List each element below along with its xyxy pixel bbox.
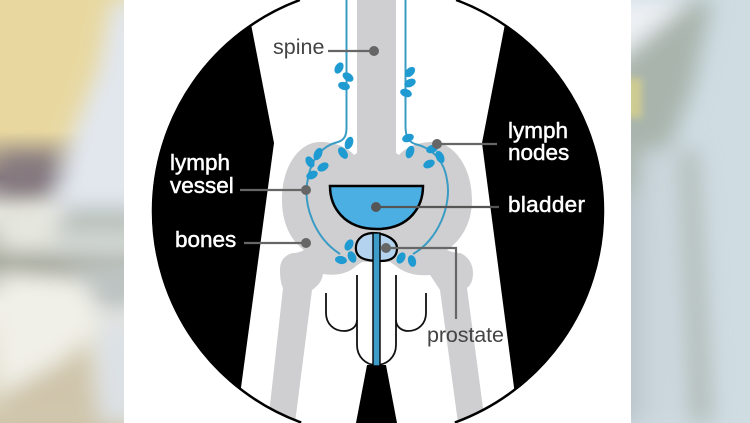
circular anatomy diagram (152, 0, 604, 423)
label: lymph nodes: nodes (508, 140, 569, 165)
label: lymph vessel: vessel (170, 173, 234, 198)
penis outline and testes (326, 275, 426, 365)
prostate (356, 233, 397, 261)
leader: lymph vessel (240, 185, 311, 195)
label: bladder: bladder (508, 192, 586, 217)
bladder (330, 186, 423, 229)
label: lymph vessel: lymph (170, 150, 230, 175)
lymph vessels (307, 0, 448, 254)
urethra (373, 233, 380, 366)
white centre panel (124, 0, 631, 423)
blurred photo background: right (631, 0, 750, 423)
crotch black wedge (356, 365, 397, 423)
blurred photo background: left (0, 0, 124, 423)
label: prostate: prostate (427, 323, 504, 347)
white body silhouette (236, 0, 519, 423)
leader: prostate (381, 243, 456, 319)
bones: spine, pelvis and femurs (268, 0, 485, 423)
label: bones: bones (175, 227, 236, 252)
circle outline over white body (153, 0, 603, 422)
label: spine: spine (273, 35, 324, 59)
label: lymph nodes: lymph (508, 118, 568, 143)
leader: lymph nodes (432, 139, 497, 149)
leader: bones (244, 238, 311, 248)
leader: spine (328, 46, 379, 56)
leader: bladder (371, 202, 499, 212)
lymph nodes: clusters of leaves (304, 61, 446, 268)
black circle background (152, 0, 604, 423)
